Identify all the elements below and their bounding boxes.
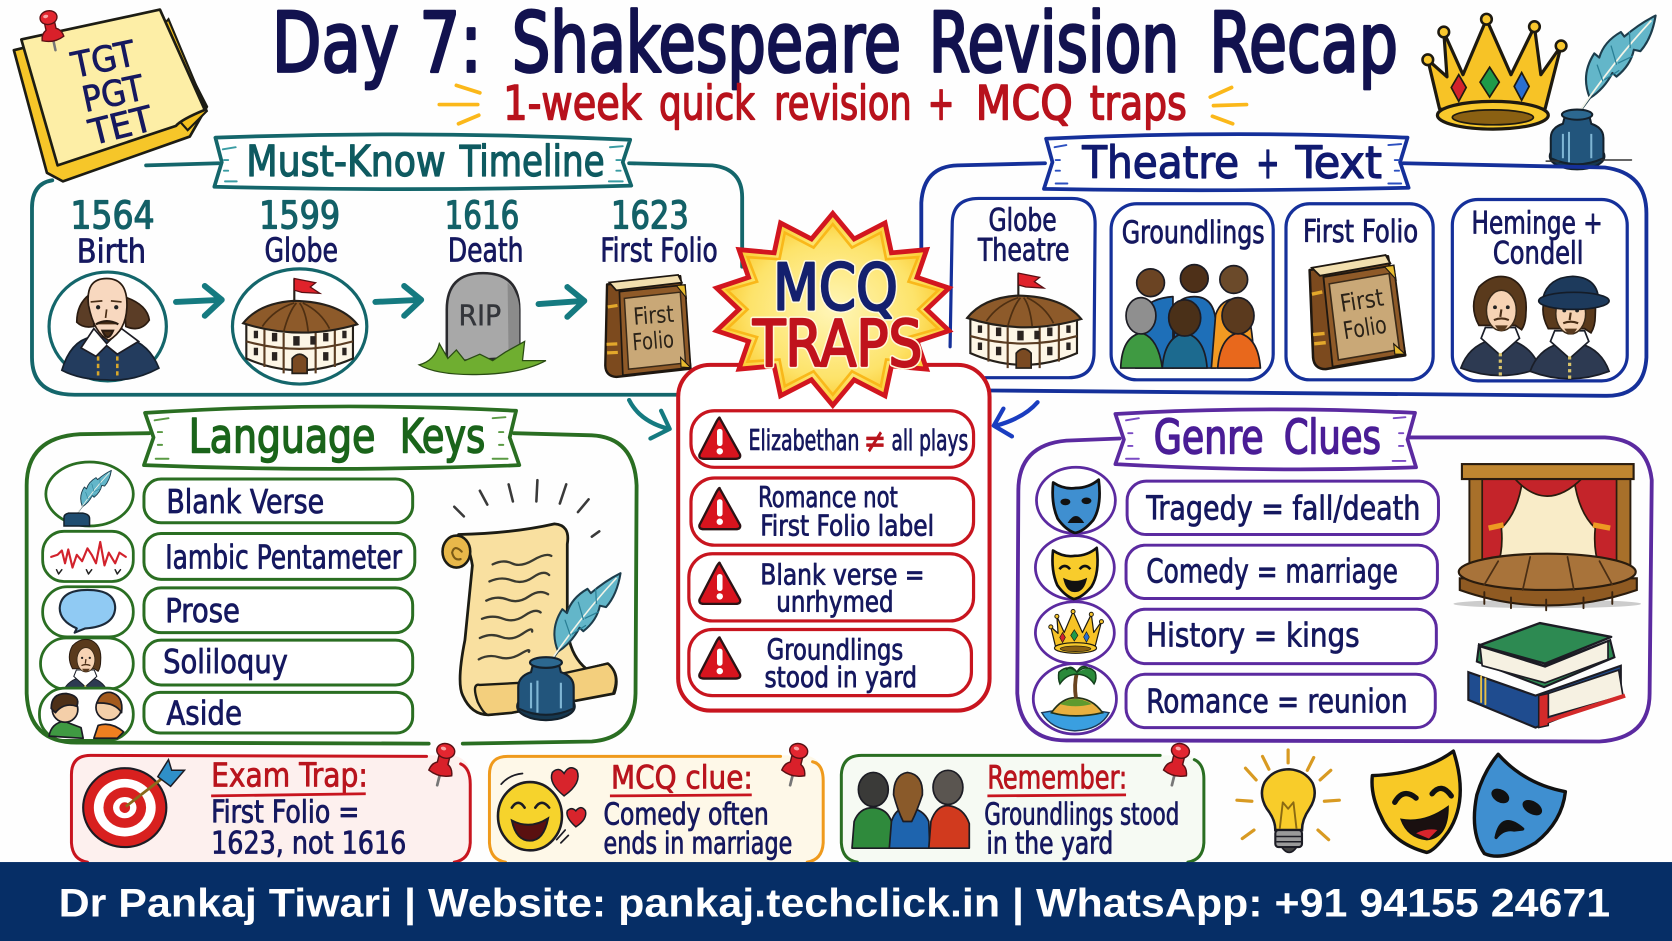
heading: genre clues banner: Clues — [1284, 410, 1381, 465]
card: first folio: Folio — [1341, 311, 1389, 345]
clue: romance — [1033, 664, 1435, 734]
icon: three groundlings from behind — [852, 770, 969, 848]
callout: remember: Groundlings stood — [984, 798, 1179, 833]
icon: comedy mask — [1372, 751, 1460, 852]
icon: First Folio book: First — [632, 300, 675, 331]
callout: MCQ traps starburst: TRAPS — [752, 308, 922, 382]
sticky note: TGT PGT TET: TGT — [67, 33, 140, 87]
callout: MCQ clue: MCQ clue: — [611, 758, 753, 796]
term: aside: Aside — [166, 693, 242, 732]
icon: smiley with hearts — [498, 768, 586, 850]
heading: theatre + text banner: Theatre — [1081, 136, 1239, 189]
term: blank verse: Blank Verse — [166, 482, 324, 521]
heading: theatre + text banner: Text — [1295, 136, 1382, 189]
trap row: blank verse: Blank verse = — [760, 558, 925, 592]
trap row: groundlings: stood in yard — [765, 660, 917, 694]
icon: arrow — [538, 287, 584, 317]
subtitle: quick — [659, 76, 755, 131]
callout: MCQ traps starburst: MCQ — [773, 251, 898, 325]
heading: must-know timeline banner: Must-Know — [246, 137, 446, 187]
callout: MCQ traps starburst — [717, 213, 949, 405]
icon: arrow — [375, 286, 421, 316]
heading: language keys banner: Keys — [400, 409, 485, 464]
trap row: groundlings — [689, 629, 971, 696]
term: iambic pentameter — [43, 531, 415, 581]
clue: comedy — [1035, 536, 1437, 600]
callout: MCQ clue: Comedy often — [604, 798, 769, 833]
card: first folio — [1286, 204, 1433, 380]
heading: must-know timeline banner — [214, 134, 631, 189]
trap row: Elizabethan: all plays — [891, 423, 968, 457]
callout: exam trap: First Folio = — [211, 795, 359, 831]
heading: genre clues banner — [1115, 409, 1416, 469]
callout: exam trap — [71, 741, 470, 864]
icon: First Folio book — [601, 271, 696, 381]
clue: history — [1035, 602, 1436, 664]
sticky note: TGT PGT TET: TET — [84, 98, 158, 154]
icon: stack of books — [1468, 623, 1625, 728]
card: groundlings: Groundlings — [1122, 215, 1265, 251]
card: heminge + condell: Condell — [1493, 236, 1583, 272]
term: aside — [39, 688, 413, 740]
icon: RIP tombstone — [419, 273, 546, 375]
title — [272, 0, 1398, 91]
card: heminge + condell: Heminge + — [1472, 206, 1603, 242]
icon: crown — [1422, 14, 1566, 129]
card: heminge + condell — [1452, 200, 1627, 382]
callout: exam trap: 1623, not 1616 — [211, 826, 406, 862]
years and event labels: Death — [448, 230, 524, 269]
sticky note: TGT PGT TET: PGT — [79, 68, 148, 121]
callout: remember: Remember: — [987, 758, 1127, 796]
subtitle: + — [928, 76, 954, 131]
footer bar: Dr Pankaj Tiwari | Website: pankaj.techclick.in | WhatsApp: +91 94155 24671 — [59, 881, 1610, 925]
subtitle: traps — [1090, 76, 1187, 131]
trap row: Elizabethan — [691, 411, 974, 467]
years and event labels: 1623 — [611, 193, 689, 238]
years and event labels: Birth — [77, 231, 146, 270]
clue: tragedy — [1036, 467, 1438, 535]
callout: MCQ traps starburst: TRAPS — [752, 308, 922, 382]
icon: quill and ink bottle — [1546, 0, 1661, 169]
years and event labels: First Folio — [600, 230, 718, 269]
term: soliloquy — [41, 638, 413, 701]
icon: light bulb — [1237, 750, 1339, 852]
icon: arrow — [176, 286, 222, 316]
card: globe theatre: Theatre — [977, 232, 1070, 268]
sticky note: TGT PGT TET — [14, 9, 207, 181]
icon: teal arrow to MCQ panel — [629, 400, 670, 438]
clue: history: History = kings — [1146, 616, 1360, 655]
subtitle: MCQ — [976, 76, 1073, 131]
years and event labels: 1599 — [259, 193, 340, 238]
card: globe theatre: Globe — [988, 202, 1057, 238]
icon: RIP tombstone: RIP — [459, 298, 501, 332]
heading: language keys banner: Language — [189, 409, 375, 464]
panel: MCQ traps — [678, 365, 990, 711]
heading: theatre + text banner: + — [1256, 136, 1280, 189]
trap row: blank verse — [689, 554, 974, 621]
term: iambic pentameter: Iambic Pentameter — [165, 538, 403, 577]
years and event labels: Globe — [264, 230, 338, 269]
term: soliloquy: Soliloquy — [163, 642, 288, 681]
years and event labels: 1616 — [445, 193, 519, 238]
subtitle — [439, 76, 1247, 131]
heading: language keys banner — [144, 406, 519, 469]
trap row: Elizabethan: Elizabethan — [749, 423, 859, 457]
card: groundlings — [1111, 204, 1273, 380]
panel: theatre + text — [921, 134, 1646, 396]
trap row: romance: Romance not — [758, 480, 898, 514]
years and event labels — [70, 193, 718, 270]
icon: blue arrow to MCQ panel — [994, 402, 1038, 436]
icon: theatre stage — [1453, 464, 1641, 610]
card: globe theatre — [950, 198, 1095, 378]
icon: Shakespeare portrait — [49, 272, 166, 381]
subtitle: 1-week — [503, 76, 642, 131]
term: prose: Prose — [165, 591, 240, 630]
card: first folio: First — [1338, 283, 1386, 318]
clue: tragedy: Tragedy = fall/death — [1145, 489, 1420, 528]
clue: romance: Romance = reunion — [1146, 682, 1408, 721]
card: first folio: First Folio — [1303, 214, 1418, 250]
icon: Globe theatre — [232, 269, 367, 384]
icon: target with arrow — [83, 760, 184, 847]
callout: exam trap: Exam Trap: — [211, 755, 368, 794]
heading: theatre + text banner — [1044, 134, 1409, 190]
callout: MCQ traps starburst: MCQ — [773, 251, 898, 325]
callout: remember: in the yard — [986, 827, 1113, 862]
term: blank verse — [46, 462, 413, 526]
trap row: groundlings: Groundlings — [767, 632, 903, 666]
icon: tragedy mask — [1474, 754, 1565, 856]
panel: must-know timeline — [32, 134, 742, 395]
trap row: romance — [691, 478, 974, 545]
panel: language keys — [27, 406, 637, 744]
trap row: blank verse: unrhymed — [776, 584, 894, 618]
callout: MCQ clue — [489, 741, 823, 864]
callout: MCQ clue: ends in marriage — [604, 827, 792, 862]
heading: genre clues banner: Genre — [1154, 410, 1264, 465]
trap row: Elizabethan: ≠ — [864, 421, 886, 461]
panel: genre clues — [1017, 409, 1652, 741]
callout: remember — [841, 741, 1204, 864]
icon: scroll with quill and ink — [443, 480, 626, 720]
icon: First Folio book: Folio — [631, 325, 675, 356]
term: prose — [43, 587, 413, 637]
heading: must-know timeline banner: Timeline — [459, 137, 605, 187]
clue: comedy: Comedy = marriage — [1146, 552, 1398, 591]
years and event labels: 1564 — [70, 193, 155, 238]
trap row: romance: First Folio label — [760, 509, 934, 543]
subtitle: revision — [774, 76, 912, 131]
footer bar — [0, 862, 1672, 941]
